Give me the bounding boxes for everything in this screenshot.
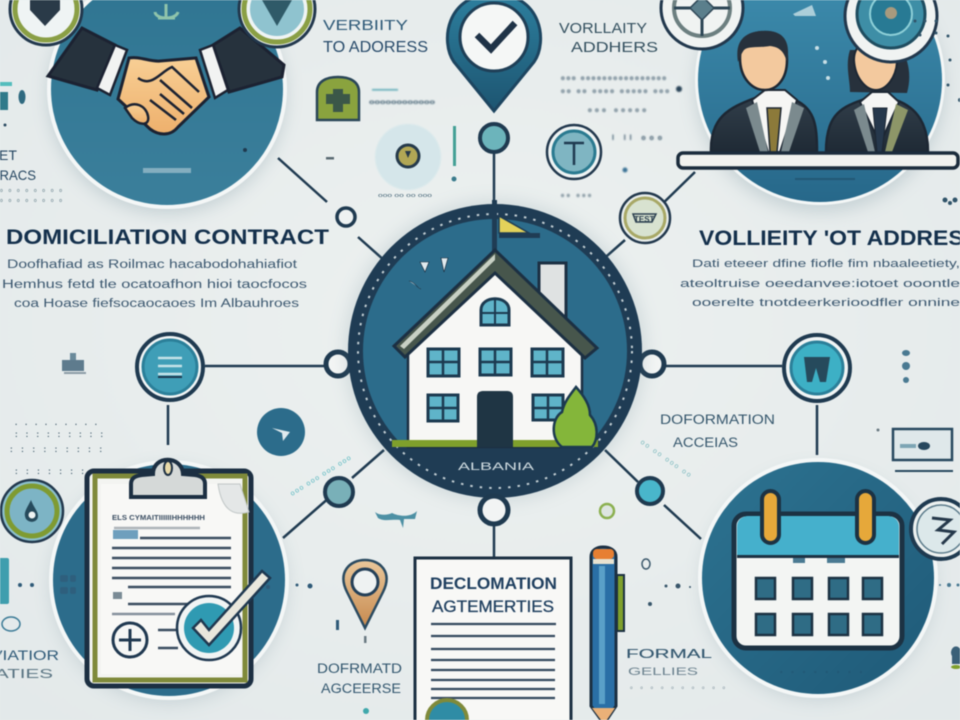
text: tiny label by tag [369,89,435,106]
icon: plane badge [257,408,305,456]
map pin with check [447,0,541,111]
chimney [539,263,566,318]
panel: checklist clipboard [49,460,289,703]
door [477,391,513,447]
icon: badge heart [239,0,315,47]
text: verbity to address: TO ADORESS [323,39,428,56]
grass [392,440,598,447]
text: tiny dotted text: l ll ooo [612,135,662,142]
doc lines [112,528,231,648]
icon: badge target [845,0,937,62]
text: volliaity addrers: ADDHERS [571,39,658,56]
icon: badge top left [10,0,82,45]
day grid [756,578,882,635]
node: left [326,352,350,376]
figure: woman [826,40,928,152]
icon: green tag [317,77,359,120]
panel: calendar: o o o o o o o o [780,669,863,674]
node: top [480,124,508,152]
text block: domiciliation description: Hemhus fetd tle ocatoafhon hioi taocfocos [2,279,307,291]
heading: vollicity of address: VOLLIEITY 'OT ADDRESS [699,227,960,250]
dots near pencil [600,504,691,606]
calendar body [734,514,902,648]
text: left edge label: o o o o o o o o [0,188,62,194]
dots: left grid: : : : : : : : : : [10,445,102,454]
text: formal gellies [626,646,725,690]
clipboard board [87,471,251,686]
icon: T badge [547,125,601,179]
text: doformatd access [317,661,402,714]
icon: pencil [591,547,624,720]
icon: list badge left [137,334,203,400]
check badge [177,596,241,660]
rings [762,491,779,543]
text: left bottom label [0,647,59,681]
node: right [640,352,664,376]
icon: droplet badge [1,480,63,542]
panel: declaration document: DECLOMATION [430,575,557,593]
icon: left edge fragment [0,82,26,126]
icon: small screen [893,429,953,472]
text: doformatd access: AGCEERSE [321,681,401,696]
text: tiny dotted text: ooo ooooo [588,108,646,114]
figure: man [711,31,817,152]
text block: domiciliation description [2,259,307,310]
text block: vollicity description [680,258,960,309]
dots: right edge top [914,20,960,205]
text: formal gellies: FORMAL [626,646,712,661]
icon: target glow [326,124,456,199]
panel: handshake [47,0,287,213]
text block: domiciliation description: coa Hoase fiefsocaocaoes Im Albauhroes [14,298,299,310]
node: diagonal left bottom [325,478,353,506]
dots: left grid [10,418,103,476]
text: verbity to address [323,18,428,56]
node: top left [337,208,355,226]
panel: declaration document [415,558,571,720]
text: doformation access [660,412,775,450]
icon: right badge [911,499,960,559]
icon: small figure left [62,353,86,374]
text: tiny dotted text: oo ooo [561,193,591,199]
left edge fragment: bottom [0,558,20,631]
text block: vollicity description: Dati eteeer dfine fiofle fim nbaaleetiety, [692,258,960,270]
windows [428,299,563,421]
text: volliaity addrers [559,21,658,56]
panel: people [678,0,958,212]
text: formal gellies: GELLIES [628,666,698,678]
tiny teal label: ooo ooo ooo ooo [289,455,353,498]
text: left edge label: o o o o o o o o [0,198,62,204]
text block: domiciliation description: Doofhafiad as Roilmac hacabodohahiafiot [7,259,298,271]
icon: test badge: TEST [634,215,655,224]
bush [554,387,597,447]
dots: left grid: . . . . . . . . . [15,418,97,427]
text: doformation access: DOFORMATION [660,412,775,427]
text: doformatd access: DOFRMATD [317,661,402,676]
icon: badge compass [661,0,743,49]
heading: domiciliation contract: DOMICILIATION CONTRACT [6,226,329,249]
flag [499,216,529,233]
dots: clipboard sides [18,575,339,630]
icon: small anchor [155,4,178,18]
icon: location pin brown [343,560,387,643]
label: albania: ALBANIA [458,461,535,473]
central house emblem [345,200,645,501]
text: tiny label by tag: oooooooooooo [369,99,435,106]
roof [394,250,597,358]
text: volliaity addrers: VORLLAITY [559,21,647,37]
text: tiny dotted text: oo oo oooo ooooo ooo [561,89,669,95]
text: formal gellies: o o o o o o o o o o [630,685,725,690]
page curl [218,484,249,513]
birds [409,258,448,289]
node: bottom [480,496,508,524]
dots: left grid: : : : : : : : : : [15,430,103,439]
text block: vollicity description: ooerelte tnotdeerkerioodfler onnine [692,297,960,309]
icon: test badge [620,193,670,243]
icon: target glow: ooo oo oo ooo [378,193,432,199]
clip [131,460,205,497]
mustache mark [375,511,417,528]
icon: handshake [48,28,284,134]
tiny teal label right: oo oo ooo oo [639,439,692,479]
node: diagonal right bottom [637,478,663,504]
text: doformation access: ACCEIAS [673,435,738,450]
panel: declaration document: AGTEMERTIES [432,598,554,616]
dots: left grid: : : : : : : : : [15,467,95,476]
plus badge [113,623,147,657]
text: verbity to address: VERBIITY [323,18,408,34]
connector lines [168,150,817,558]
text: tiny dotted text: ooo oooooooooooooooo [561,76,666,82]
shelf [678,153,958,168]
house walls [408,272,582,447]
panel: calendar [698,458,938,700]
doc title: ELS CYMAITIIIIIIHHHHHH [112,513,205,522]
icon: list badge right [784,335,850,401]
text: left edge label [0,147,62,204]
text block: vollicity description: ateoltruise oeedanvee:iotoet ooontle [680,278,960,290]
seal [427,700,467,720]
text: tiny dotted text [561,76,682,199]
dots: right details [876,350,960,669]
